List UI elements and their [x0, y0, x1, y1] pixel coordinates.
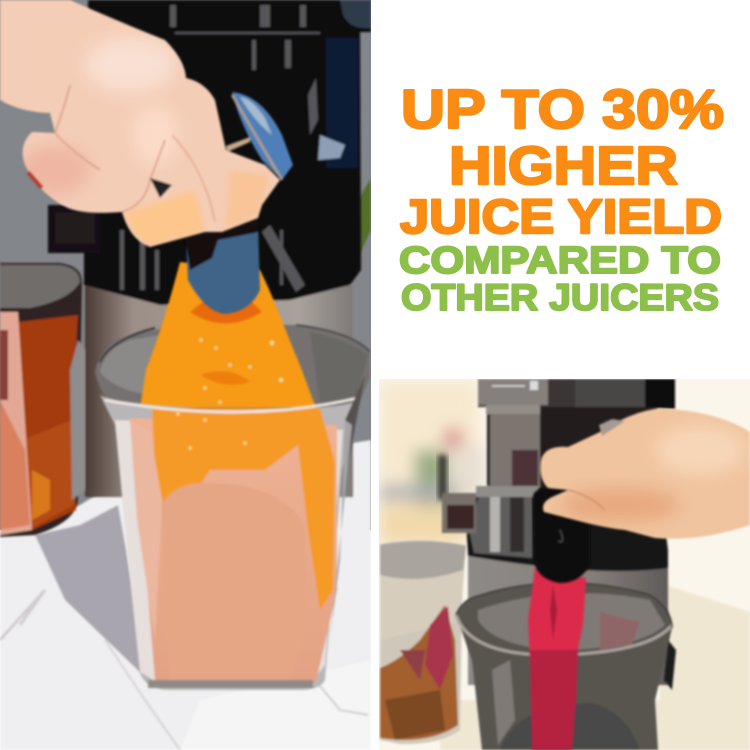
jar with carrot pulp	[0, 263, 85, 537]
red juice stream	[528, 568, 586, 750]
hand gripping juicer handle	[0, 0, 293, 247]
juicer	[442, 379, 675, 685]
glass jug with red juice	[456, 583, 676, 750]
headline line: up to 30%: UP TO 30%	[401, 78, 724, 140]
subheading line: compared to: COMPARED TO	[399, 240, 721, 282]
blurred kitchen background	[379, 379, 750, 750]
glass jug with juice	[100, 375, 365, 690]
juicer body	[48, 0, 371, 497]
countertop	[440, 583, 750, 750]
headline: juice yield claim	[399, 78, 724, 318]
subheading line: other juicers: OTHER JUICERS	[401, 277, 719, 318]
ring with blue stone	[226, 92, 293, 180]
shiny juice stream	[140, 262, 316, 408]
marble counter	[0, 440, 371, 750]
headline line: higher: HIGHER	[449, 136, 678, 196]
hand holding handle	[540, 408, 750, 539]
black spout handle	[533, 485, 590, 583]
leaf	[359, 178, 371, 254]
cast shadow	[34, 504, 142, 674]
pulp jar	[380, 540, 466, 744]
photo: orange juice pouring from juicer	[0, 0, 371, 750]
wall background	[0, 0, 371, 530]
photo: red juice pouring from juicer	[379, 379, 750, 750]
glass jug rim behind stream	[95, 325, 370, 412]
juicer spout handle	[185, 218, 260, 314]
headline line: juice yield: JUICE YIELD	[400, 191, 722, 244]
